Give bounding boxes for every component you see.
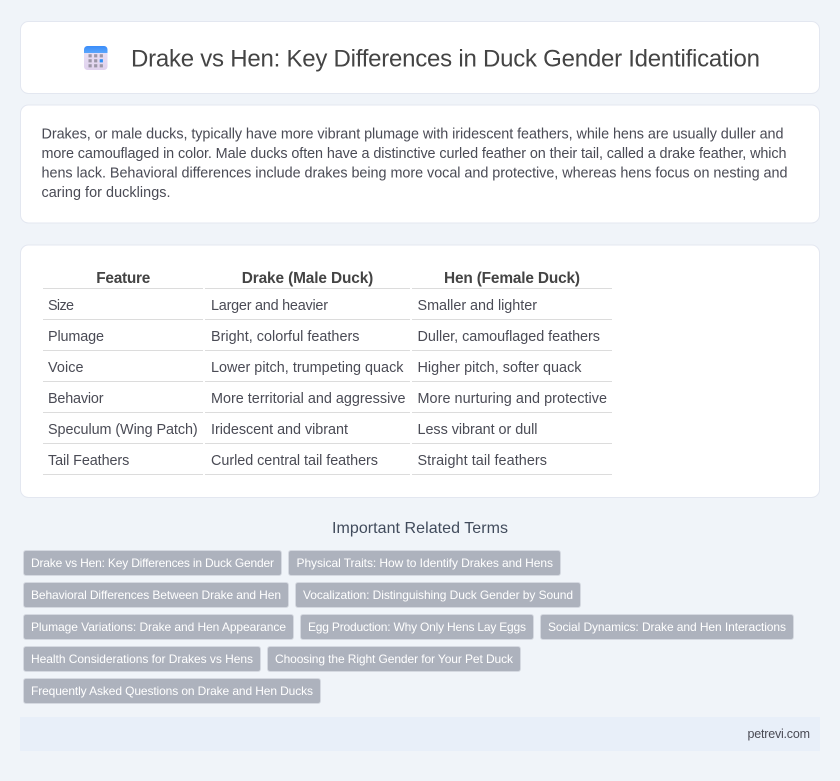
row: plumage: Duller, camouflaged feathers bbox=[418, 329, 600, 345]
row: plumage: Bright, colorful feathers bbox=[211, 329, 360, 345]
panel: summary paragraph: hens lack. Behavioral differences include drakes being more vocal and protective, whereas hens focus on nesting and bbox=[42, 166, 788, 182]
tag bbox=[300, 614, 534, 640]
row: size: Size bbox=[48, 298, 74, 314]
row: plumage bbox=[48, 329, 600, 345]
tag bbox=[24, 678, 320, 704]
tag: Drake vs Hen: Key Differences in Duck Gender bbox=[31, 556, 274, 570]
table header row: Feature bbox=[96, 270, 151, 287]
table header row: Hen (Female Duck) bbox=[444, 270, 580, 287]
tag bbox=[24, 614, 294, 640]
tag bbox=[540, 614, 794, 640]
row: voice: Higher pitch, softer quack bbox=[418, 360, 582, 376]
row: behavior: More territorial and aggressive bbox=[211, 391, 406, 407]
row: behavior: Behavior bbox=[48, 391, 104, 407]
row: behavior: More nurturing and protective bbox=[418, 391, 607, 407]
row: size: Larger and heavier bbox=[211, 298, 328, 314]
heading: related terms: Important Related Terms bbox=[332, 520, 508, 537]
row: speculum bbox=[48, 422, 538, 438]
row: size bbox=[48, 298, 537, 314]
row: tail feathers: Curled central tail feathers bbox=[211, 453, 378, 469]
row: tail feathers: Straight tail feathers bbox=[418, 453, 547, 469]
tag bbox=[296, 582, 580, 608]
table header row bbox=[96, 270, 580, 287]
row: speculum: Speculum (Wing Patch) bbox=[48, 422, 198, 438]
row: plumage: Plumage bbox=[48, 329, 104, 345]
row: behavior bbox=[48, 391, 607, 407]
panel: summary paragraph: more camouflaged in color. Male ducks often have a distinctive curled feather on their tail, called a drake feather, which bbox=[42, 146, 786, 162]
row: tail feathers: Tail Feathers bbox=[48, 453, 129, 469]
row: voice bbox=[48, 360, 582, 376]
row: speculum: Less vibrant or dull bbox=[418, 422, 538, 438]
tag bbox=[288, 550, 560, 576]
tag: Vocalization: Distinguishing Duck Gender by Sound bbox=[303, 588, 573, 602]
tag bbox=[24, 646, 260, 672]
row: size: Smaller and lighter bbox=[418, 298, 537, 314]
tag: Choosing the Right Gender for Your Pet Duck bbox=[275, 652, 514, 666]
tag: Egg Production: Why Only Hens Lay Eggs bbox=[308, 620, 526, 634]
row: tail feathers bbox=[48, 453, 547, 469]
tag bbox=[268, 646, 520, 672]
footer bar: petrevi.com bbox=[748, 727, 810, 741]
tag: Physical Traits: How to Identify Drakes and Hens bbox=[296, 556, 553, 570]
tag: Social Dynamics: Drake and Hen Interactions bbox=[548, 620, 786, 634]
row: voice: Lower pitch, trumpeting quack bbox=[211, 360, 404, 376]
panel: header bbox=[20, 22, 820, 94]
table header row: Drake (Male Duck) bbox=[242, 270, 373, 287]
tag: Behavioral Differences Between Drake and Hen bbox=[31, 588, 281, 602]
icon: calendar bbox=[84, 46, 108, 70]
panel: comparison table bbox=[20, 245, 820, 498]
tag bbox=[24, 582, 288, 608]
tag: Plumage Variations: Drake and Hen Appearance bbox=[31, 620, 286, 634]
panel: summary paragraph: caring for ducklings. bbox=[42, 185, 170, 201]
tag: Health Considerations for Drakes vs Hens bbox=[31, 652, 253, 666]
panel: summary paragraph bbox=[20, 105, 820, 223]
panel: summary paragraph: Drakes, or male ducks, typically have more vibrant plumage with iridescent feathers, while hens are usually duller and bbox=[42, 126, 784, 142]
row: voice: Voice bbox=[48, 360, 84, 376]
related term tags bbox=[24, 550, 794, 704]
tag: Frequently Asked Questions on Drake and Hen Ducks bbox=[31, 684, 313, 698]
tag bbox=[24, 550, 282, 576]
row: speculum: Iridescent and vibrant bbox=[211, 422, 348, 438]
title: Drake vs Hen: Key Differences in Duck Gender Identification bbox=[131, 46, 760, 72]
footer bar bbox=[20, 717, 820, 751]
